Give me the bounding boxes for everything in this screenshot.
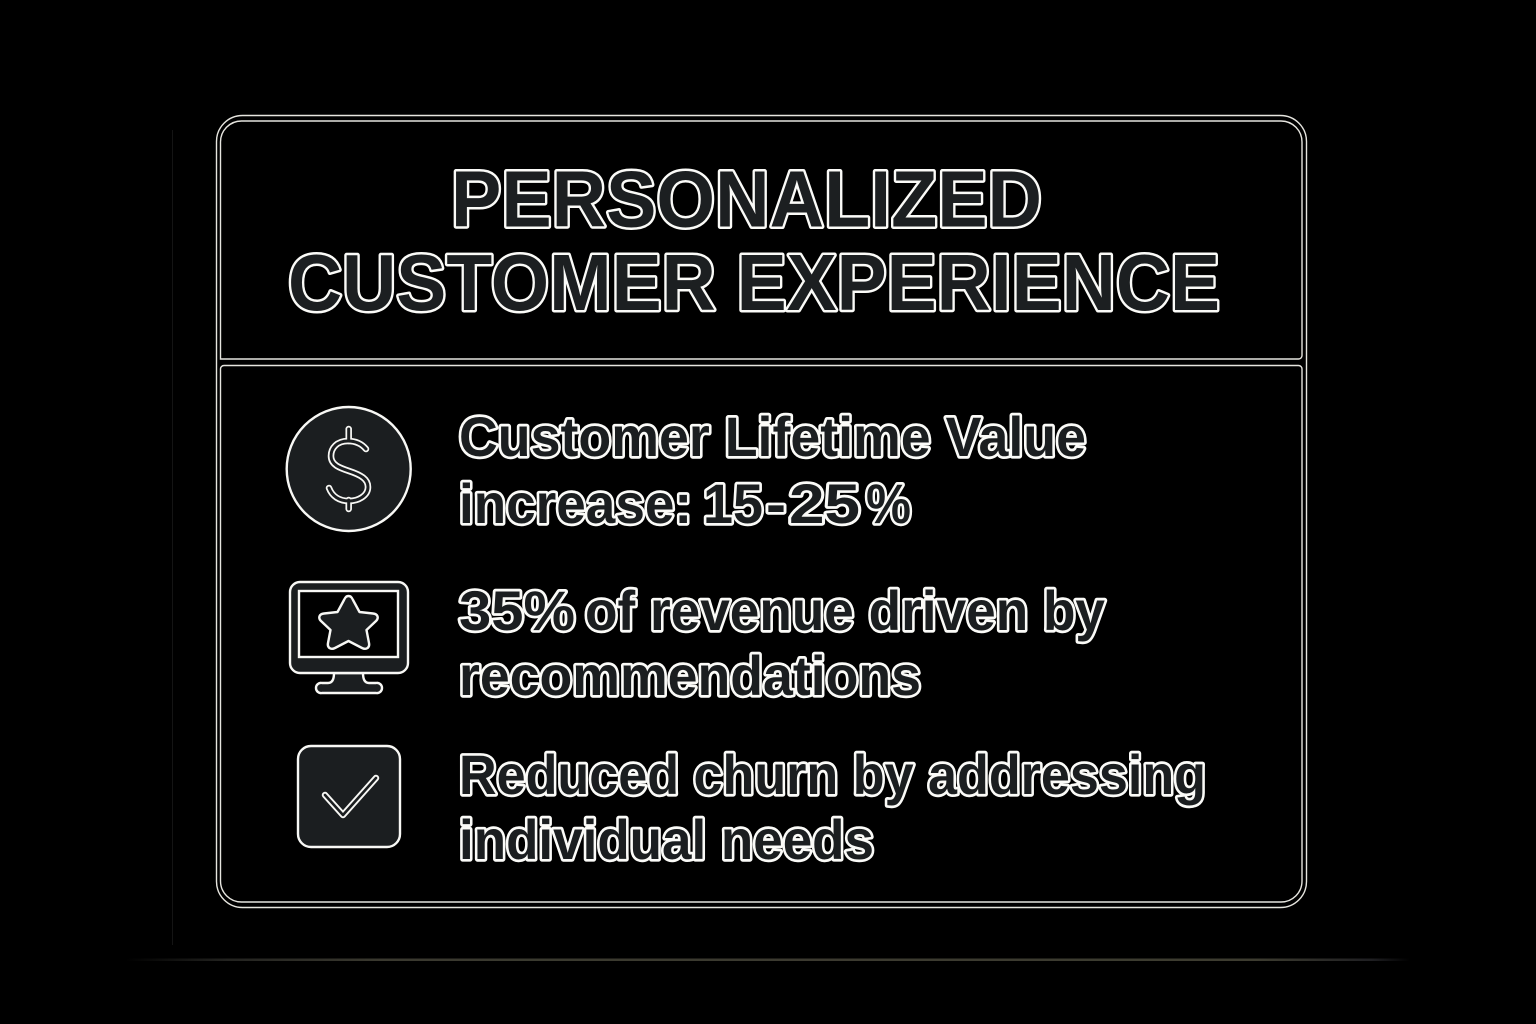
text: customer lifetime value bbox=[459, 405, 1086, 535]
text: customer lifetime value: % bbox=[866, 472, 911, 535]
text: customer lifetime value: - bbox=[766, 472, 786, 535]
panel: outer frame bbox=[216, 116, 1306, 908]
icon: dollar coin bbox=[287, 407, 411, 531]
text: reduced churn bbox=[459, 743, 1206, 871]
title: CUSTOMER EXPERIENCE bbox=[288, 238, 1220, 327]
title bbox=[288, 154, 1220, 327]
text: revenue from recommendations: of revenue driven by bbox=[585, 579, 1105, 642]
text: customer lifetime value: Customer Lifetime Value bbox=[459, 405, 1086, 468]
text: reduced churn: Reduced churn by addressing bbox=[459, 743, 1206, 806]
text: customer lifetime value: 15 bbox=[703, 472, 763, 535]
title: PERSONALIZED bbox=[451, 154, 1042, 244]
icon: checkbox bbox=[298, 746, 400, 847]
icon: monitor with star bbox=[290, 582, 408, 693]
text: revenue from recommendations: recommendations bbox=[459, 644, 921, 707]
panel: header bbox=[220, 121, 1302, 359]
text: customer lifetime value: 25 bbox=[789, 472, 860, 535]
text: revenue from recommendations: 35% bbox=[459, 579, 575, 642]
text: reduced churn: individual needs bbox=[459, 808, 874, 871]
text: customer lifetime value: increase: bbox=[459, 472, 692, 535]
text: revenue from recommendations bbox=[459, 579, 1105, 707]
panel: metrics bbox=[220, 366, 1302, 902]
